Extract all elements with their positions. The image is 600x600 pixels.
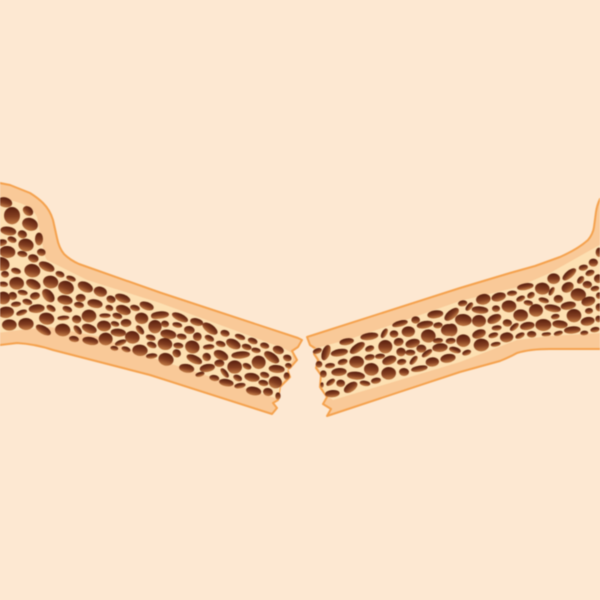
- right bone pores: [447, 248, 600, 356]
- right bone fragment: [307, 197, 600, 416]
- left bone spongy interior: [0, 196, 293, 399]
- left bone cortical shell: [0, 182, 302, 414]
- left bone pores near fracture: [151, 311, 292, 399]
- right bone cortical shell: [307, 197, 600, 416]
- right bone spongy interior: [313, 243, 600, 400]
- left bone pores: [0, 196, 162, 358]
- left bone fragment: [0, 182, 302, 414]
- right bone pores near fracture: [313, 306, 463, 397]
